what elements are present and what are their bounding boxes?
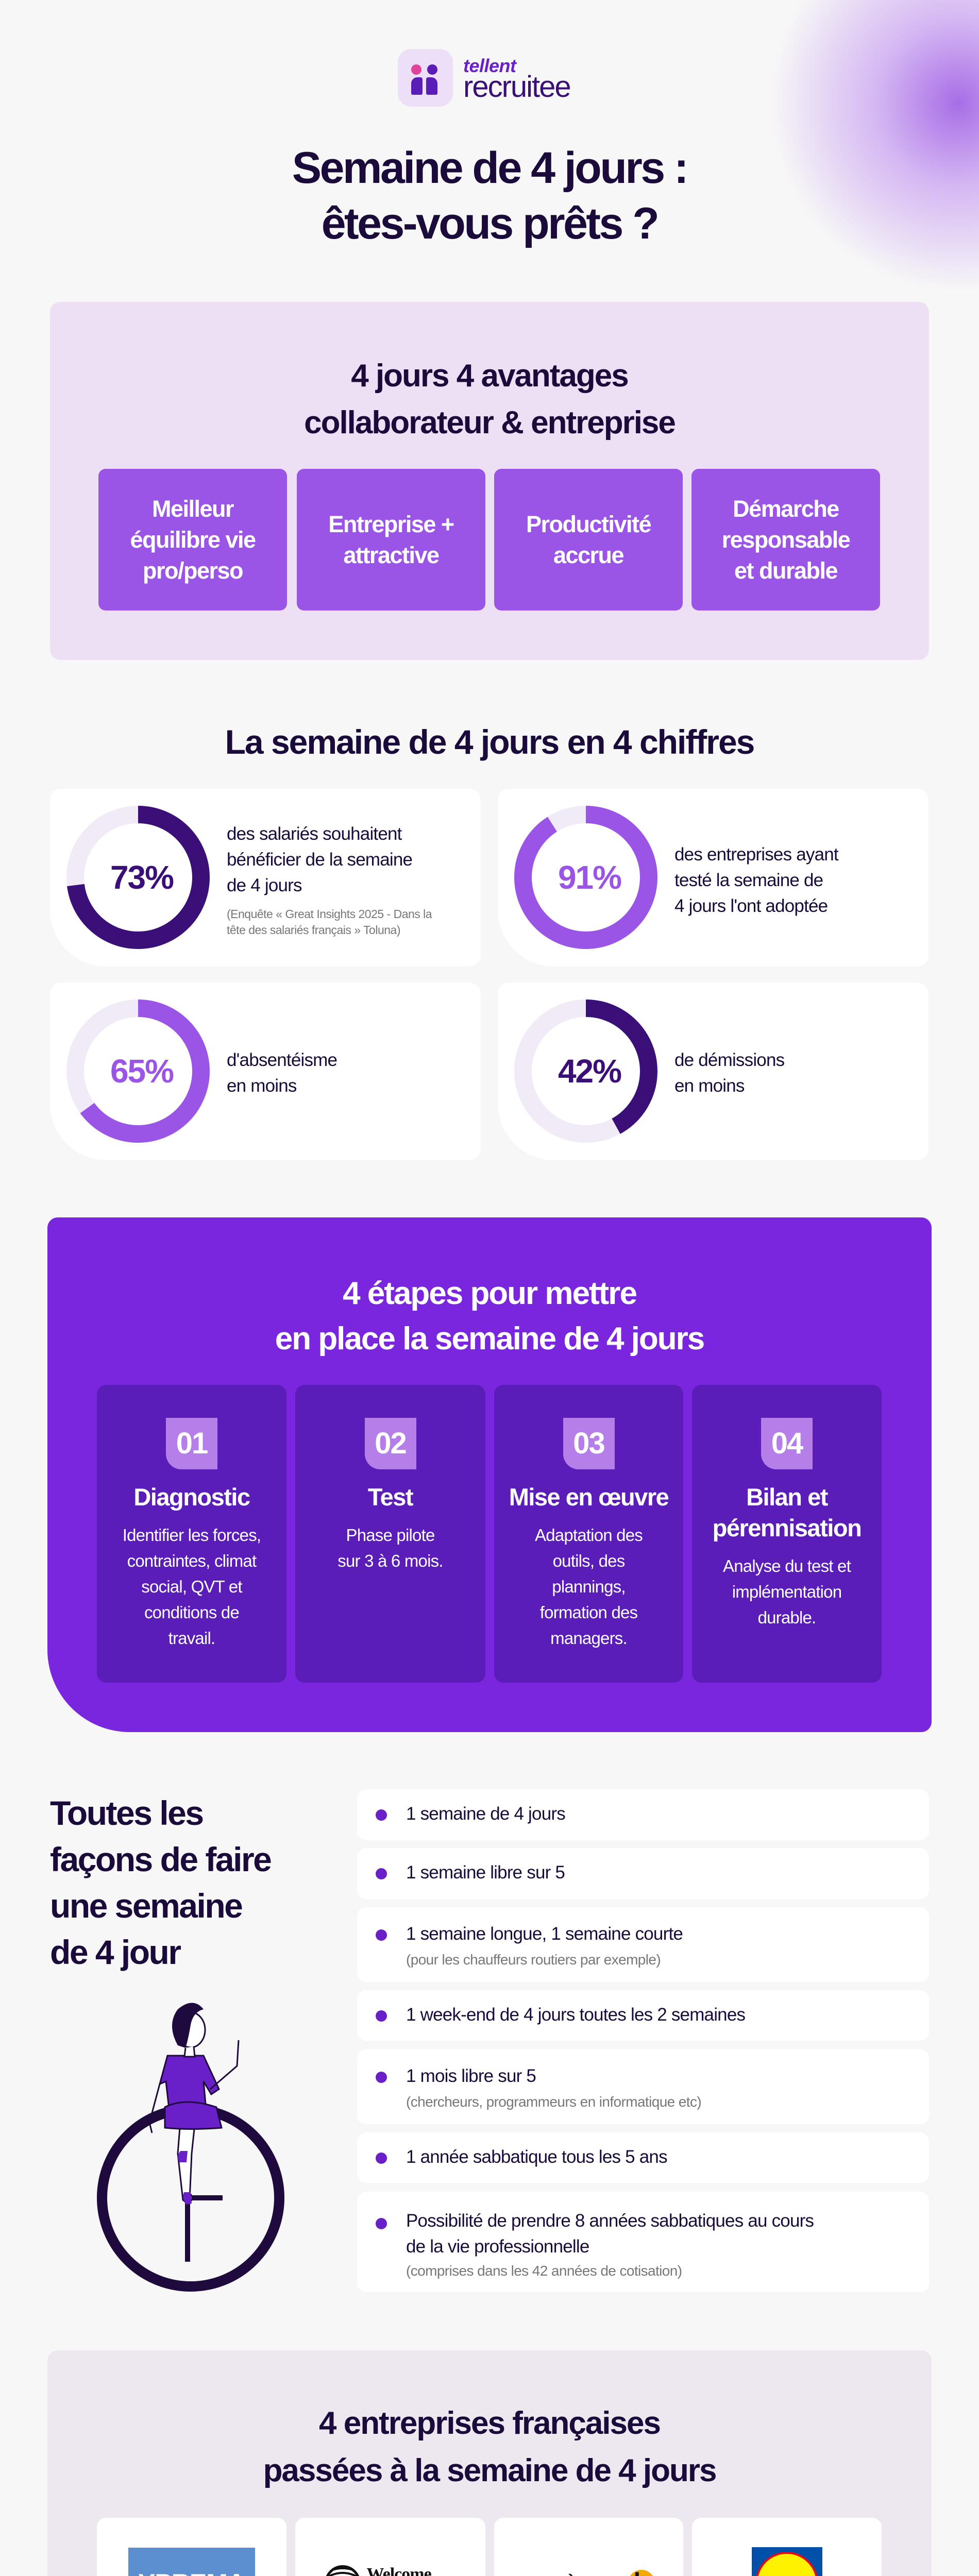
item 4 (357, 1990, 929, 2041)
stat card: 73% (50, 789, 481, 967)
step 03 (494, 1385, 683, 1683)
box: attractive (297, 469, 485, 611)
donut 73 (66, 806, 210, 949)
step 04: implémentation (732, 1582, 841, 1601)
step 03: 03 (573, 1427, 604, 1460)
logo: WTTJ (326, 2565, 431, 2576)
list: façons (376, 1804, 814, 2279)
item 7: (comprises dans les 42 années de cotisation) (406, 2263, 682, 2279)
box: équilibre: pro/perso (143, 557, 243, 583)
box: équilibre (98, 469, 287, 611)
item 5 (357, 2049, 929, 2124)
card: systèmes b (494, 2518, 683, 2576)
stat card: 73%: 73% (110, 859, 173, 896)
heading: façons: de 4 jour (50, 1933, 180, 1971)
stat card: 65%: d'absentéisme (227, 1050, 337, 1070)
step 01: social, QVT et (141, 1577, 242, 1596)
heading: avantages (304, 358, 675, 440)
step 03: outils, des (553, 1551, 624, 1570)
step 04: pérennisation (713, 1514, 861, 1541)
panel: avantages (50, 302, 929, 660)
item 1: 1 semaine de 4 jours (406, 1804, 565, 1824)
title: Semaine de 4 jours : (292, 143, 687, 193)
item 2 (357, 1848, 929, 1899)
title (292, 143, 687, 248)
logo: recruitee (463, 70, 570, 104)
logo (398, 49, 570, 107)
box: équilibre: Meilleur (152, 496, 233, 521)
card: Welcome to the Jungle (295, 2518, 485, 2576)
stat card: 42%: en moins (674, 1076, 745, 1096)
step 01 (97, 1385, 286, 1683)
stat card: 65%: 65% (110, 1053, 173, 1090)
box: productivité: accrue (553, 542, 623, 568)
box: démarche: et durable (734, 557, 837, 583)
step 02: Test (368, 1483, 413, 1511)
panel: entreprises (47, 2350, 932, 2576)
step 03: plannings, (552, 1577, 626, 1596)
box: démarche (691, 469, 880, 611)
step 02 (295, 1385, 485, 1683)
box: démarche: responsable (722, 527, 850, 552)
item 3 (357, 1907, 929, 1982)
stat card: 42% (498, 982, 929, 1160)
heading: façons (50, 1794, 271, 1971)
stat card: 42%: 42% (558, 1053, 621, 1090)
heading: entreprises: 4 entreprises françaises (319, 2405, 660, 2441)
step 01: 01 (176, 1427, 207, 1460)
stat card: 73%: (Enquête « Great Insights 2025 - Dans la (227, 907, 432, 921)
stat card: 73%: de 4 jours (227, 875, 302, 895)
heading: étapes: 4 étapes pour mettre (343, 1276, 636, 1311)
box: productivité: Productivité (526, 511, 651, 537)
step 02: Phase pilote (346, 1526, 435, 1545)
item 2: 1 semaine libre sur 5 (406, 1862, 565, 1883)
item 7: de la vie professionnelle (406, 2236, 589, 2257)
step 02: sur 3 à 6 mois. (337, 1551, 443, 1570)
heading: façons: une semaine (50, 1887, 242, 1925)
icon: logo mark (398, 49, 453, 107)
heading: avantages: 4 jours 4 avantages (351, 358, 628, 394)
stat card: 73%: bénéficier de la semaine (227, 850, 412, 870)
box: productivité (494, 469, 683, 611)
item 5: 1 mois libre sur 5 (406, 2066, 536, 2086)
item 3: (pour les chauffeurs routiers par exemple) (406, 1952, 661, 1968)
step 04: Bilan et (746, 1483, 828, 1511)
item 4: 1 week-end de 4 jours toutes les 2 semaines (406, 2005, 745, 2025)
item 6 (357, 2132, 929, 2183)
step 01: Diagnostic (133, 1483, 250, 1511)
step 04 (692, 1385, 882, 1683)
step 01: conditions de (144, 1603, 239, 1622)
card: Lidl (692, 2518, 882, 2576)
step 03: Mise en œuvre (509, 1483, 668, 1511)
heading: étapes (275, 1276, 704, 1357)
heading: chiffres: La semaine de 4 jours en 4 chiffres (225, 723, 754, 761)
step 04: durable. (758, 1608, 816, 1627)
stat card: 91%: des entreprises ayant (674, 844, 838, 865)
step 04: 04 (771, 1427, 802, 1460)
step 02: 02 (375, 1427, 406, 1460)
title: êtes-vous prêts ? (322, 199, 657, 248)
heading: étapes: en place la semaine de 4 jours (275, 1321, 704, 1357)
step 01: Identifier les forces, (123, 1526, 261, 1545)
stat card: 91%: testé la semaine de (674, 870, 823, 890)
step 03: managers. (550, 1629, 627, 1648)
step 03: formation des (540, 1603, 637, 1622)
item 7: Possibilité de prendre 8 années sabbatiques au cours (406, 2211, 814, 2231)
heading: façons: façons de faire (50, 1840, 271, 1878)
panel: étapes (47, 1217, 932, 1732)
stat card: 65%: en moins (227, 1076, 297, 1096)
stat card: 42%: de démissions (674, 1050, 784, 1070)
step 01: travail. (168, 1629, 215, 1648)
heading: avantages: collaborateur & entreprise (304, 405, 675, 440)
heading: entreprises (263, 2405, 716, 2488)
stat card: 65% (50, 982, 481, 1160)
stat card: 73%: tête des salariés français » Toluna) (227, 923, 400, 937)
step 04: Analyse du test et (723, 1556, 851, 1575)
item 6: 1 année sabbatique tous les 5 ans (406, 2147, 667, 2167)
card: Yprema (97, 2518, 286, 2576)
box: démarche: Démarche (733, 496, 839, 521)
step 03: Adaptation des (535, 1526, 643, 1545)
item 7 (357, 2192, 929, 2292)
heading: entreprises: passées à la semaine de 4 jours (263, 2453, 716, 2488)
step 01: contraintes, climat (127, 1551, 256, 1570)
item 1 (357, 1789, 929, 1840)
heading: façons: Toutes les (50, 1794, 203, 1832)
box: attractive: Entreprise + (328, 511, 454, 537)
illustration: woman on clock (97, 2003, 284, 2292)
item 3: 1 semaine longue, 1 semaine courte (406, 1924, 683, 1944)
stat card: 91%: 4 jours l'ont adoptée (674, 896, 828, 916)
stat card: 91%: 91% (558, 859, 621, 896)
box: équilibre: équilibre vie (130, 527, 256, 552)
stat card: 73%: des salariés souhaitent (227, 824, 402, 844)
item 5: (chercheurs, programmeurs en informatique etc) (406, 2094, 701, 2110)
logo: systèmes b (522, 2568, 653, 2576)
logo: tellent (463, 55, 516, 76)
stat card: 91% (498, 789, 929, 967)
box: attractive: attractive (343, 542, 439, 568)
